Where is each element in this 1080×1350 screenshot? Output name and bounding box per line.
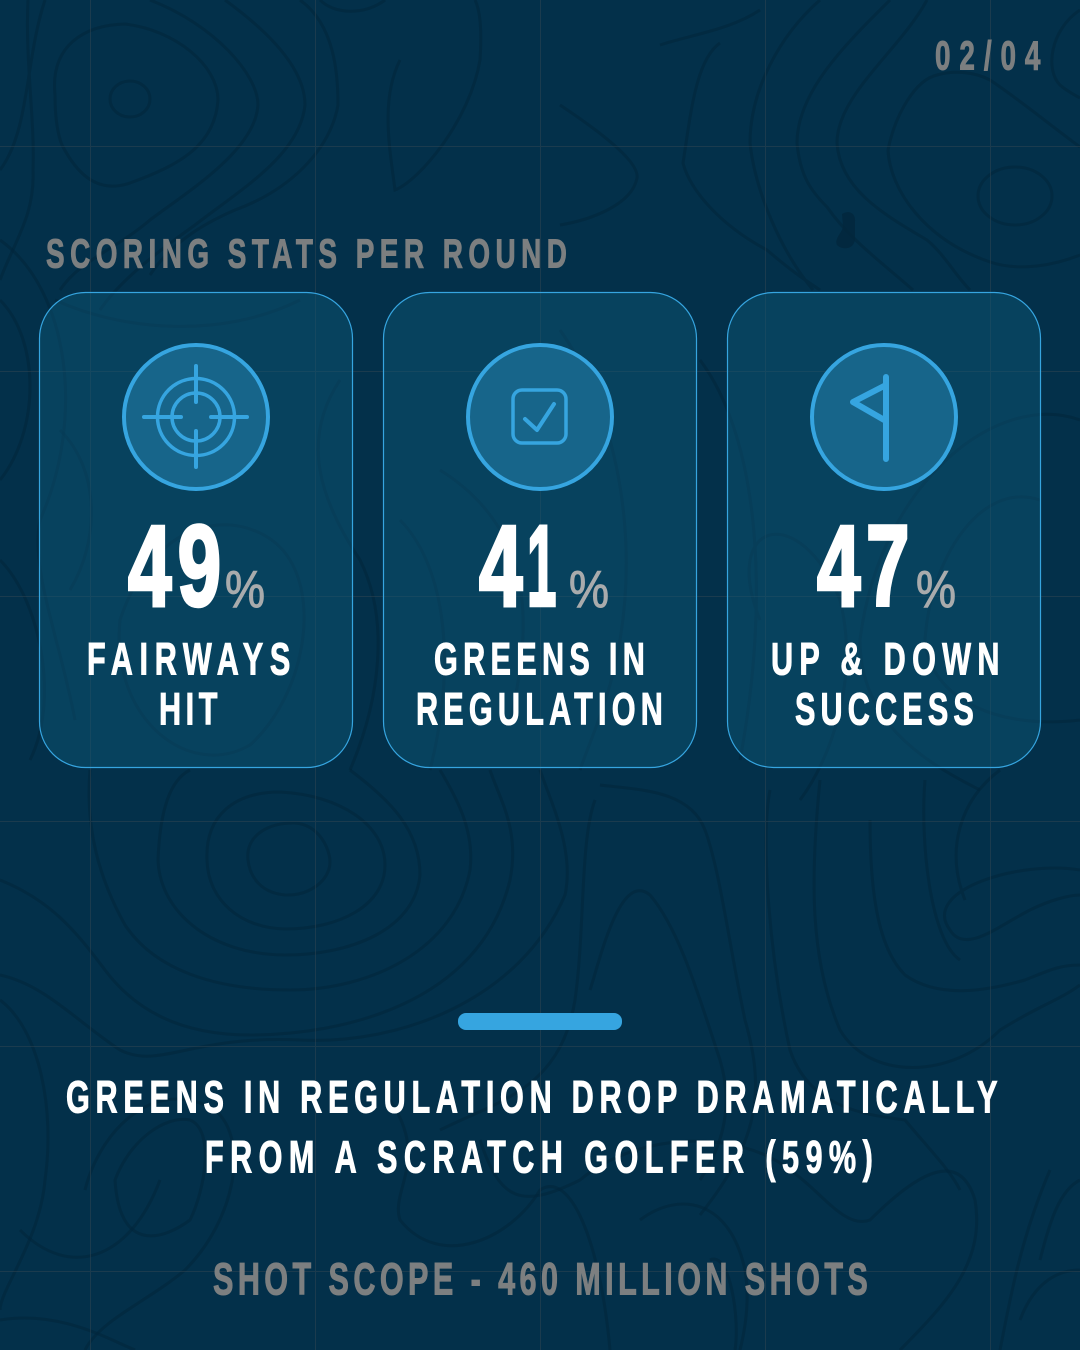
source line: SHOT SCOPE - 460 MILLION SHOTS — [213, 1255, 868, 1305]
label: greens in regulation: REGULATION — [416, 685, 663, 735]
ink speck — [836, 212, 855, 248]
label: up and down success — [771, 635, 999, 735]
label: fairways hit — [87, 635, 290, 735]
page number: 02/04 — [935, 33, 1041, 79]
panel: greens in regulation — [384, 292, 696, 768]
label: greens in regulation: GREENS IN — [434, 635, 645, 685]
stat: 41 percent — [479, 501, 609, 630]
stat: 41 percent: % — [569, 561, 609, 619]
stat: 47 percent — [817, 501, 956, 630]
accent bar — [458, 1013, 622, 1030]
stat: 41 percent: 1 — [527, 501, 556, 630]
stat: 49 percent: 49 — [128, 501, 221, 630]
label: greens in regulation — [416, 635, 663, 735]
icon: target crosshair — [124, 345, 268, 489]
icon: checkbox — [468, 345, 612, 489]
icon: flag — [812, 345, 956, 489]
stat: 47 percent: % — [916, 561, 956, 619]
label: up and down success: SUCCESS — [795, 685, 974, 735]
label: fairways hit: HIT — [159, 685, 218, 735]
stat: 49 percent: % — [225, 561, 265, 619]
panel: fairways hit — [40, 292, 352, 768]
label: up and down success: UP & DOWN — [771, 635, 999, 685]
stat: 49 percent — [128, 501, 265, 630]
panel: up and down success — [728, 292, 1040, 768]
takeaway text: FROM A SCRATCH GOLFER (59%) — [205, 1133, 873, 1183]
stat: 47 percent: 47 — [817, 501, 909, 630]
label: fairways hit: FAIRWAYS — [87, 635, 290, 685]
stat: 41 percent: 4 — [479, 501, 523, 630]
takeaway text — [66, 1073, 998, 1183]
section heading: SCORING STATS PER ROUND — [46, 231, 567, 277]
takeaway text: GREENS IN REGULATION DROP DRAMATICALLY — [66, 1073, 998, 1123]
